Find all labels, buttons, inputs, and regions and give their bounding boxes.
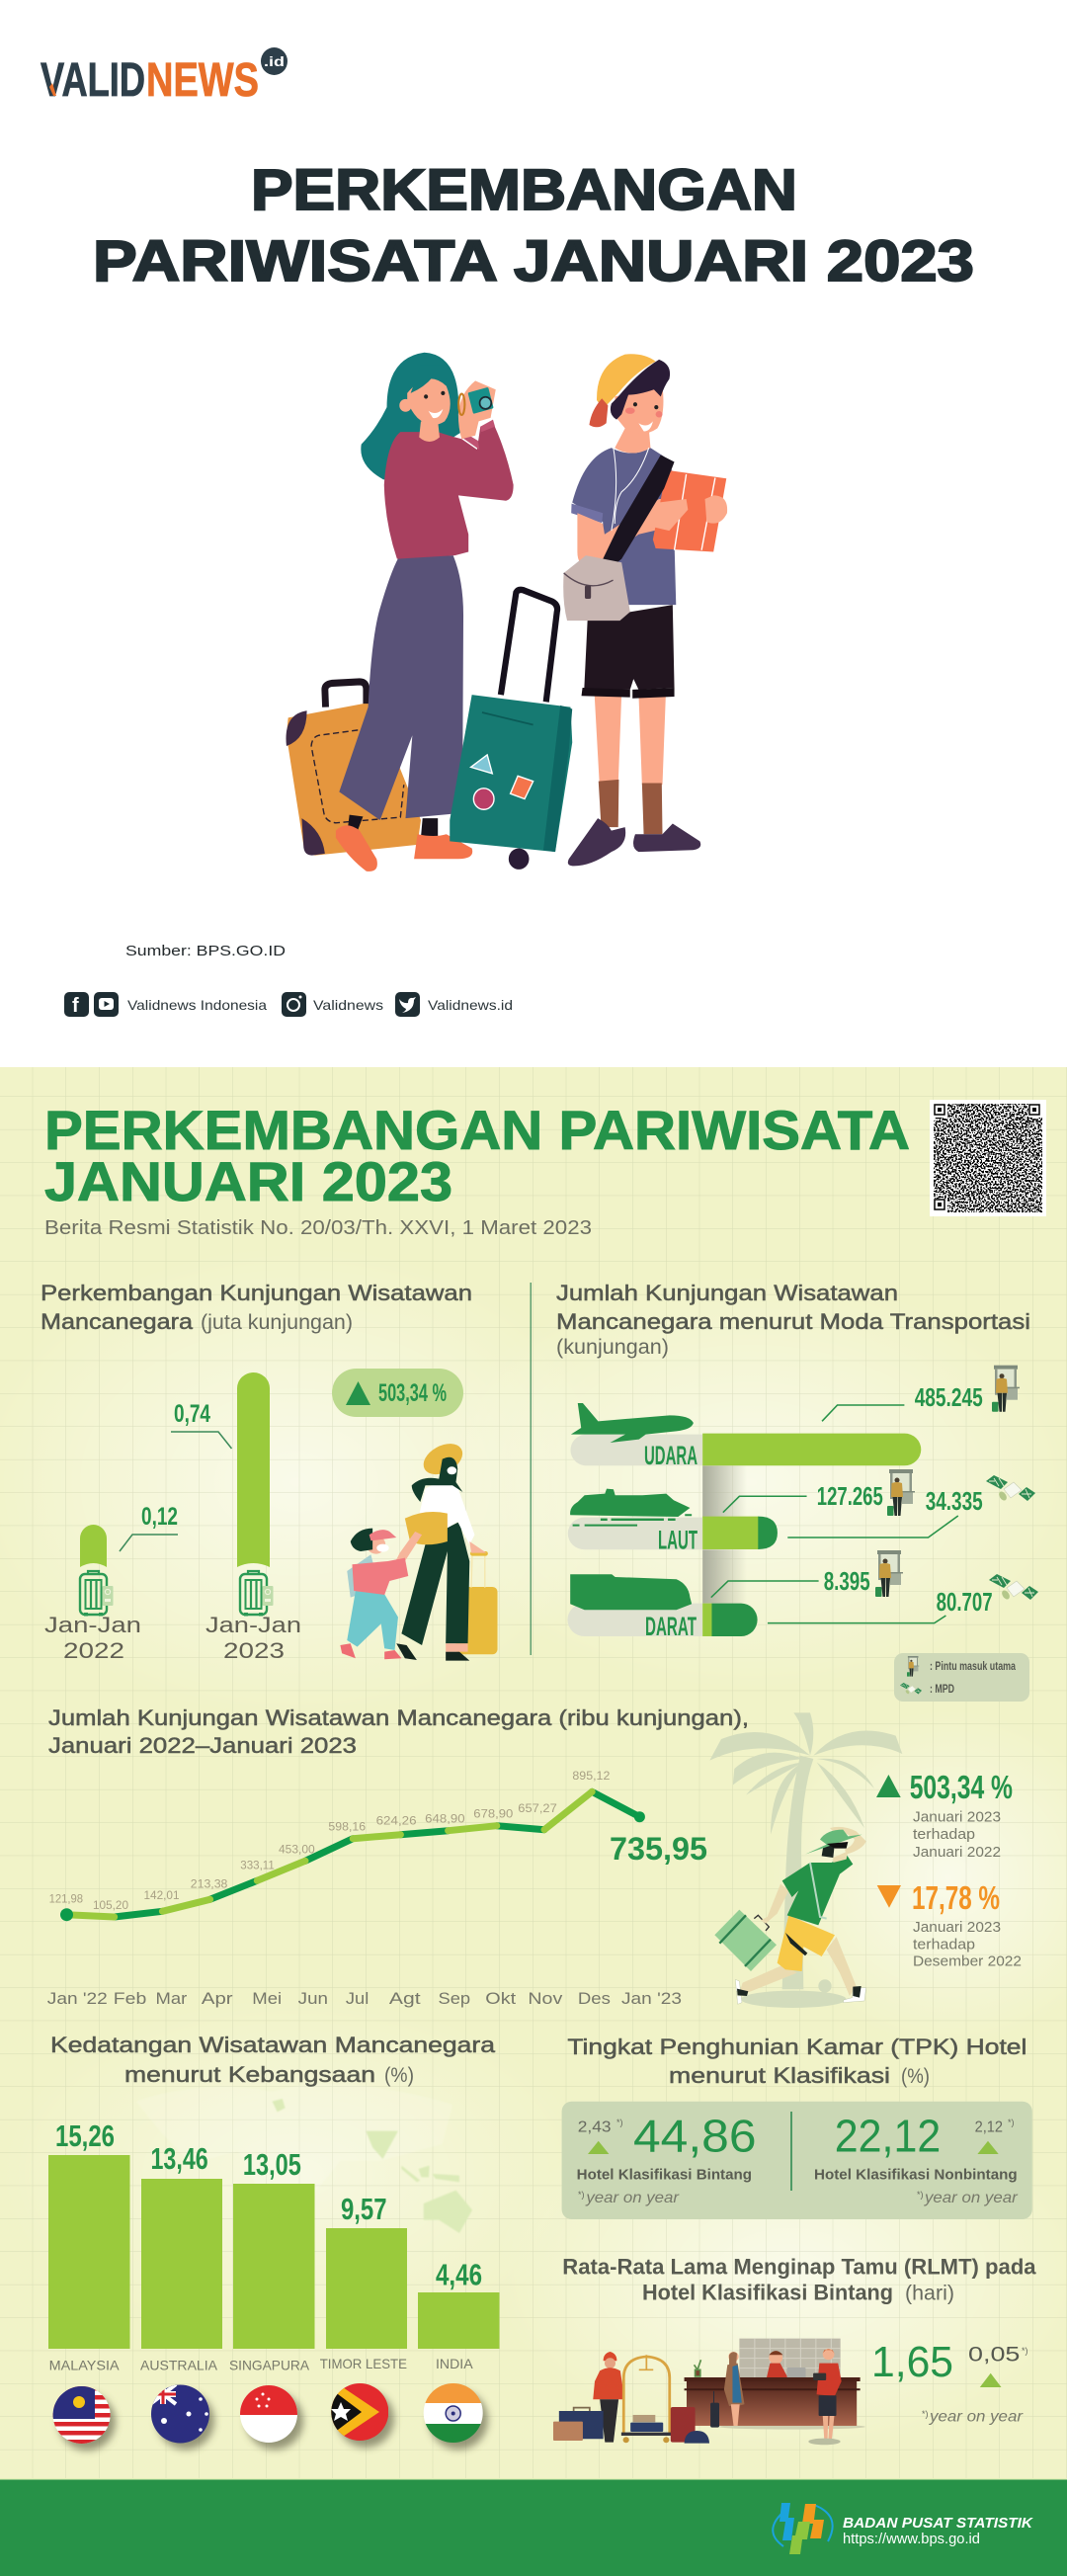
month axis: Jun [298, 1989, 328, 2008]
heading: room occupancy: Tingkat Penghunian Kamar (TPK) Hotel [567, 2035, 1026, 2059]
icons: main gate [875, 1366, 1020, 1597]
heading: room occupancy: menurut Klasifikasi [669, 2063, 890, 2088]
heading: nationality: (%) [384, 2064, 414, 2087]
social media row: Validnews [313, 997, 383, 1013]
bar chart [48, 2119, 500, 2373]
bar: Jan-Jan 2023: 0,74 [174, 1400, 210, 1428]
values: transport counts: 485.245 [915, 1382, 983, 1412]
bar chart: 13,05 [243, 2147, 301, 2182]
card: occupancy values: Hotel Klasifikasi Bintang [577, 2167, 752, 2184]
flag: Malaysia [52, 2386, 116, 2451]
data labels: 598,16 [328, 1822, 366, 1834]
heading: main green title: JANUARI 2023 [44, 1150, 452, 1212]
icon: ship [570, 1489, 692, 1527]
bar: Jan-Jan 2022: 2022 [63, 1638, 124, 1663]
stat: year on year change: 503,34 % [910, 1769, 1013, 1805]
heading: nationality [50, 2033, 496, 2087]
card: occupancy values: *) [578, 2190, 585, 2200]
stat: month on month change [877, 1879, 1022, 1970]
title [93, 158, 974, 293]
data labels: 142,01 [144, 1890, 180, 1902]
value: length of stay: *) [922, 2409, 929, 2419]
data labels: 624,26 [376, 1816, 417, 1828]
panel: transport mode [556, 1281, 1038, 1702]
bar: Jan-Jan 2022: 0,12 [141, 1503, 178, 1531]
heading: nationality: Kedatangan Wisatawan Mancanegara [50, 2033, 496, 2057]
month axis: Feb [114, 1989, 146, 2008]
social media row: Validnews Indonesia [127, 997, 267, 1013]
month axis: Jul [346, 1989, 369, 2008]
illustration: two tourists with luggage [287, 353, 727, 872]
month axis: Apr [202, 1989, 233, 2008]
icon: plane [571, 1403, 694, 1443]
title: PERKEMBANGAN [251, 158, 797, 222]
BPS name and URL [843, 2515, 1033, 2547]
card: occupancy values: 2,43 [578, 2119, 612, 2136]
panel: infographic background [0, 1067, 1067, 2479]
card: occupancy values: 2,12 [975, 2119, 1003, 2136]
stat: month on month change: Desember 2022 [913, 1953, 1022, 1970]
heading: visitor growth [41, 1281, 472, 1334]
stat: month on month change: 17,78 % [912, 1879, 1000, 1916]
social media row: f [72, 995, 79, 1017]
world map backdrop [136, 2084, 472, 2233]
card: occupancy values: *) [616, 2118, 623, 2127]
data labels [49, 1771, 610, 1912]
bar chart: AUSTRALIA [140, 2358, 218, 2373]
callout: growth pill: 503,34 % [378, 1379, 447, 1407]
data labels: 657,27 [518, 1803, 557, 1815]
heading: room occupancy: (%) [901, 2065, 930, 2088]
logo: Validnews: NEWS [146, 54, 259, 107]
month axis [47, 1989, 682, 2008]
legend: : Pintu masuk utama [930, 1659, 1016, 1673]
bar: Jan-Jan 2022 [44, 1503, 178, 1663]
values: transport counts: 80.707 [937, 1587, 993, 1617]
labels: transport modes: LAUT [658, 1526, 698, 1555]
panel: length of stay [553, 2255, 1036, 2445]
legend: : MPD [930, 1682, 954, 1696]
heading: length of stay [562, 2255, 1036, 2305]
data labels: 213,38 [191, 1879, 227, 1891]
heading: main green title: PERKEMBANGAN PARIWISATA [44, 1099, 910, 1161]
bar chart: 13,46 [150, 2141, 208, 2176]
flag: Australia [150, 2384, 214, 2450]
page header: white cover [0, 0, 1067, 1067]
flag: Timor Leste [326, 2379, 394, 2448]
month axis: Agt [389, 1989, 421, 2008]
title: PARIWISATA JANUARI 2023 [93, 229, 974, 293]
month axis: Mei [252, 1989, 282, 2008]
value: length of stay: year on year [929, 2409, 1024, 2426]
heading: main green title [44, 1099, 910, 1212]
subtitle: Berita Resmi Statistik No. 20/03/Th. XXVI, 1 Maret 2023 [44, 1217, 592, 1239]
value: length of stay [871, 2338, 1028, 2426]
card: occupancy values: *) [1008, 2118, 1015, 2127]
heading: visitor growth: Perkembangan Kunjungan Wisatawan [41, 1281, 472, 1305]
heading: length of stay: Hotel Klasifikasi Bintang [642, 2281, 893, 2305]
bar chart: INDIA [436, 2356, 473, 2371]
month axis: Sep [439, 1989, 470, 2008]
card: occupancy values: *) [917, 2190, 924, 2200]
bar: Jan-Jan 2023: Jan-Jan [205, 1613, 301, 1637]
heading: monthly visitors: Januari 2022–Januari 2023 [48, 1733, 357, 1758]
values: transport counts: 127.265 [817, 1481, 883, 1511]
values: transport counts: 34.335 [926, 1486, 983, 1516]
heading: length of stay: (hari) [905, 2283, 954, 2305]
stat: year on year change: Januari 2023 [913, 1808, 1001, 1826]
panel: visitor growth [41, 1281, 498, 1663]
bar chart: SINGAPURA [229, 2358, 310, 2373]
logo: Validnews: .id [264, 53, 285, 69]
stat: year on year change [876, 1769, 1013, 1861]
line chart [60, 1791, 645, 1921]
heading: monthly visitors: Jumlah Kunjungan Wisatawan Mancanegara (ribu kunjungan), [48, 1705, 749, 1730]
panel: arrivals by nationality [48, 2033, 500, 2451]
icon: bus [570, 1574, 692, 1610]
flag: India [423, 2383, 488, 2450]
value: length of stay: 1,65 [871, 2338, 953, 2386]
heading: visitor growth: (juta kunjungan) [201, 1311, 353, 1334]
month axis: Mar [156, 1989, 188, 2008]
flag: Singapore [240, 2385, 303, 2450]
source note: Sumber: BPS.GO.ID [125, 943, 286, 959]
callout: growth pill [332, 1369, 463, 1417]
bar: Jan-Jan 2023: 2023 [223, 1638, 285, 1663]
logo: BPS [773, 2503, 833, 2554]
illustration: mother and child [340, 1438, 498, 1661]
stat: year on year change: terhadap [913, 1826, 975, 1843]
labels: transport modes: DARAT [645, 1612, 697, 1641]
social media row: Validnews.id [428, 997, 513, 1013]
values: transport counts: 8.395 [824, 1566, 870, 1596]
bar: Jan-Jan 2023 [171, 1372, 301, 1663]
stat: month on month change: terhadap [913, 1937, 975, 1953]
data labels: 105,20 [93, 1900, 128, 1912]
card: occupancy values: Hotel Klasifikasi Nonbintang [814, 2167, 1018, 2184]
social media row [64, 992, 513, 1017]
QR code [930, 1100, 1046, 1216]
heading: room occupancy [567, 2035, 1026, 2088]
heading: length of stay: Rata-Rata Lama Menginap Tamu (RLMT) pada [562, 2255, 1036, 2280]
leader lines [711, 1405, 958, 1623]
bar chart: 4,46 [436, 2258, 482, 2292]
bar chart: 9,57 [341, 2192, 387, 2226]
divider between panels [530, 1283, 532, 1655]
card: occupancy values: 22,12 [835, 2111, 941, 2162]
logo: Validnews: VALID [41, 54, 145, 107]
data labels: 333,11 [240, 1860, 275, 1871]
footer band [0, 2478, 1067, 2576]
panel: monthly visitors line chart [47, 1705, 749, 2008]
stat: year on year change: Januari 2022 [913, 1844, 1001, 1861]
month axis: Jan '23 [621, 1989, 682, 2008]
heading: transport mode: Jumlah Kunjungan Wisatawan [556, 1281, 898, 1305]
data labels: 453,00 [279, 1844, 315, 1856]
illustration: hotel lobby [553, 2339, 865, 2445]
labels: transport modes [644, 1441, 698, 1641]
BPS name and URL: https://www.bps.go.id [843, 2531, 980, 2547]
heading: transport mode: Mancanegara menurut Moda Transportasi [556, 1309, 1030, 1334]
stat: month on month change: Januari 2023 [913, 1919, 1001, 1936]
data labels: 678,90 [473, 1808, 513, 1820]
heading: nationality: menurut Kebangsaan [124, 2062, 375, 2087]
bar chart: MALAYSIA [49, 2358, 120, 2373]
month axis: Okt [485, 1989, 516, 2008]
heading: transport mode: (kunjungan) [556, 1336, 669, 1359]
heading: transport mode [556, 1281, 1030, 1359]
heading: visitor growth: Mancanegara [41, 1309, 194, 1334]
value: length of stay: *) [1022, 2346, 1028, 2356]
bar: Jan-Jan 2022: Jan-Jan [44, 1613, 141, 1637]
data labels: 121,98 [49, 1893, 83, 1905]
value: length of stay: 0,05 [968, 2343, 1020, 2366]
chart: transport bars [567, 1403, 958, 1636]
data labels: 648,90 [425, 1814, 465, 1826]
heading: monthly visitors [48, 1705, 749, 1758]
card: occupancy values: year on year [924, 2190, 1018, 2206]
legend [894, 1653, 1029, 1702]
bar chart: 15,26 [55, 2119, 115, 2153]
panel: room occupancy [562, 2035, 1032, 2219]
latest value: 735,95 [610, 1831, 707, 1867]
bar chart: TIMOR LESTE [320, 2356, 407, 2371]
icons: satellite MPD [986, 1475, 1038, 1601]
month axis: Nov [528, 1989, 563, 2008]
card: occupancy values: 44,86 [633, 2111, 757, 2162]
logo: Validnews [41, 47, 287, 107]
illustration: palm tree and traveler [709, 1712, 902, 2008]
BPS name and URL: BADAN PUSAT STATISTIK [843, 2515, 1033, 2532]
data labels: 895,12 [572, 1771, 610, 1783]
card: occupancy values: year on year [585, 2190, 680, 2206]
labels: transport modes: UDARA [644, 1441, 698, 1470]
month axis: Jan '22 [47, 1989, 108, 2008]
card: occupancy values [562, 2102, 1032, 2219]
values: transport counts [817, 1382, 993, 1617]
month axis: Des [578, 1989, 611, 2008]
